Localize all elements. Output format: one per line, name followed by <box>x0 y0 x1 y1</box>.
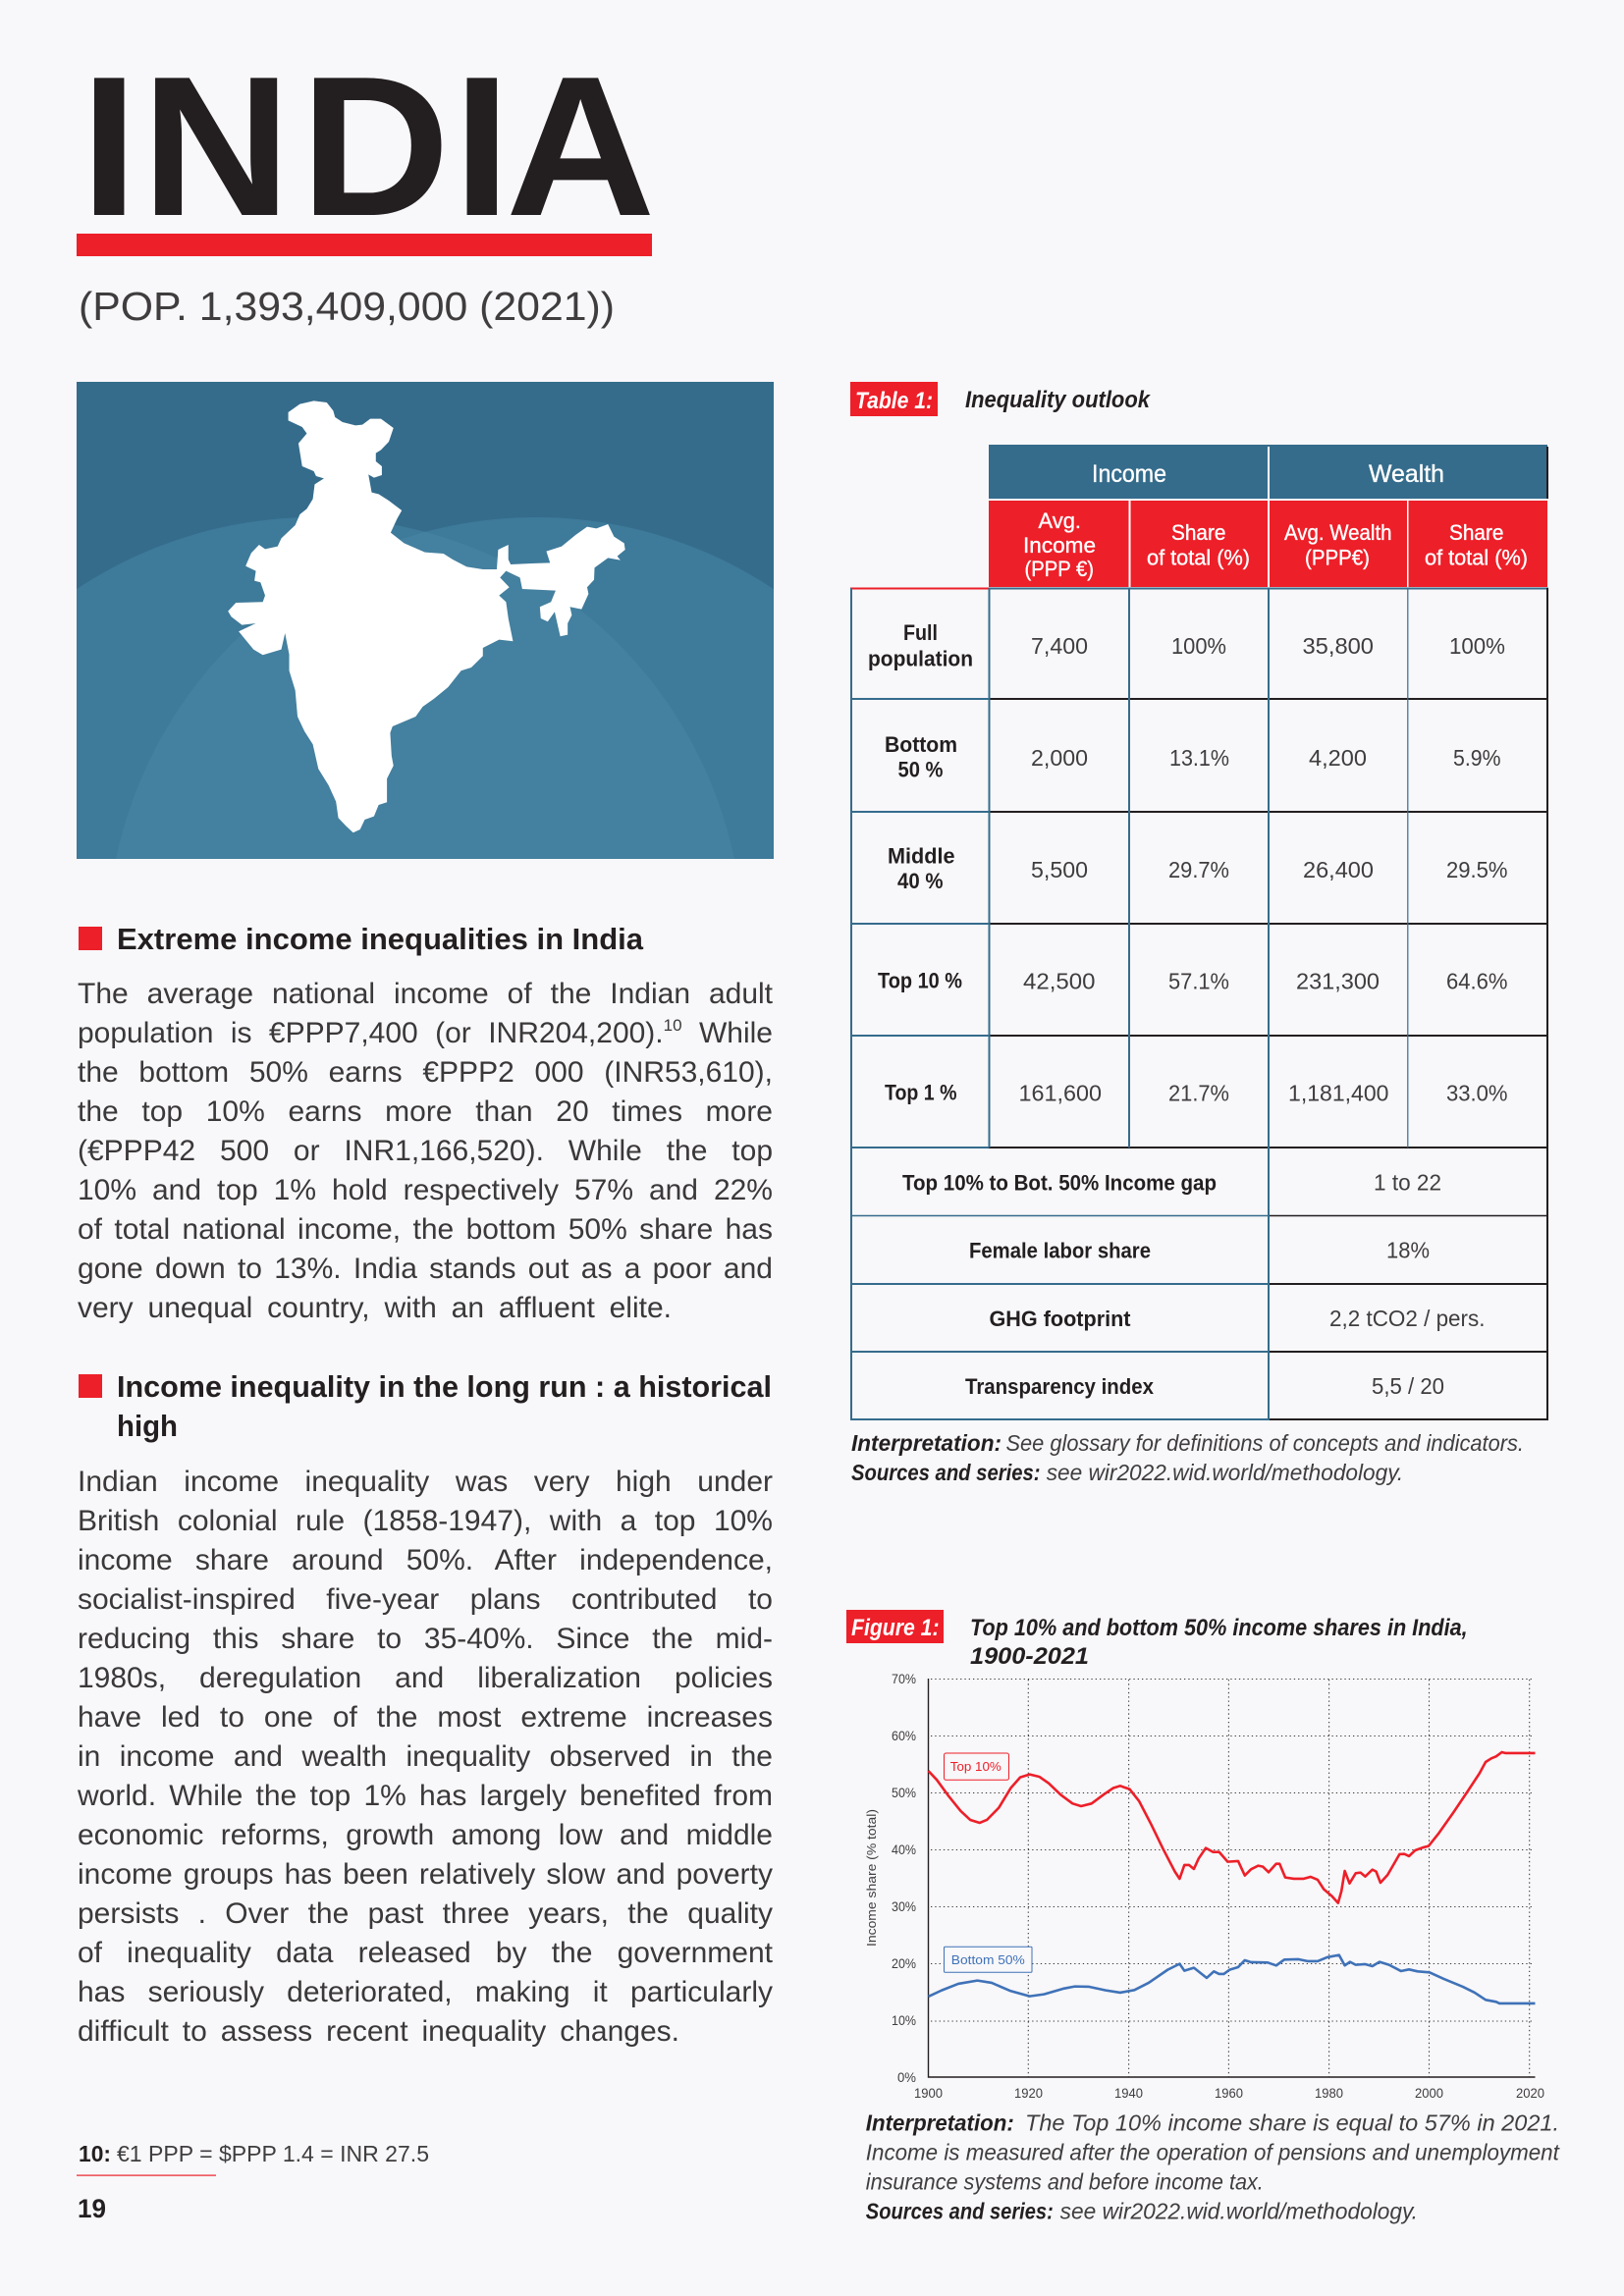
row: top 1%: 33.0% <box>1446 1080 1508 1105</box>
row: top 1%: Top 1 % <box>885 1080 956 1105</box>
x axis labels: 1960 <box>1215 2085 1243 2101</box>
row: full population: Full <box>903 620 938 645</box>
legend: bottom 50% <box>945 1947 1032 1972</box>
text block: inequality in the long run: difficult to assess recent inequality changes. <box>78 2015 679 2048</box>
line chart: income shares <box>865 1671 1544 2101</box>
text block: inequality in the long run: income groups has been relatively slow and poverty <box>78 1858 773 1891</box>
footnote: €1 PPP = $PPP 1.4 = INR 27.5 <box>117 2141 429 2166</box>
text block: extreme income inequalities: (€PPP42 500 or INR1,166,520). While the top <box>78 1135 773 1167</box>
table caption: Table 1: <box>855 388 933 414</box>
heading: inequality in the long run <box>79 1369 772 1443</box>
series: top 10% <box>928 1752 1535 1903</box>
table subheader: red columns: Avg. Wealth <box>1284 520 1392 545</box>
row: bottom 50%: Bottom <box>885 732 957 757</box>
row: middle 40%: Middle <box>888 844 954 868</box>
series: bottom 50% <box>928 1955 1535 2003</box>
x axis labels: 2000 <box>1415 2085 1443 2101</box>
text block: extreme income inequalities: The average national income of the Indian adult <box>78 978 773 1010</box>
chart grid <box>931 1679 1532 2077</box>
row: full population: population <box>868 646 973 671</box>
x axis labels: 1980 <box>1315 2085 1343 2101</box>
row: full population: 100% <box>1171 633 1226 659</box>
table header: income and wealth: Income <box>1092 460 1166 488</box>
panel: map of India <box>77 382 774 859</box>
text block: inequality in the long run: persists . Over the past three years, the quality <box>78 1897 773 1930</box>
text block: extreme income inequalities: 10% and top 1% hold respectively 57% and 22% <box>78 1174 773 1206</box>
figure note: interpretation and sources: insurance systems and before income tax. <box>866 2169 1264 2195</box>
figure note: interpretation and sources: Income is measured after the operation of pensions and unemployment <box>866 2140 1560 2165</box>
row: bottom 50%: 2,000 <box>1031 745 1088 771</box>
figure caption <box>846 1610 1468 1670</box>
x axis labels: 1940 <box>1114 2085 1143 2101</box>
y axis labels: 20% <box>892 1955 916 1971</box>
figure note: interpretation and sources <box>866 2110 1560 2224</box>
table caption <box>850 382 1152 416</box>
table subheader: red columns: of total (%) <box>1425 546 1528 569</box>
row: top 10%: 57.1% <box>1168 968 1229 993</box>
figure note: interpretation and sources: Sources and series: <box>866 2199 1054 2224</box>
row: top 1% <box>885 1080 1508 1105</box>
row: transparency index: Transparency index <box>965 1374 1155 1399</box>
icon: India silhouette <box>228 400 625 832</box>
legend: top 10% <box>945 1753 1009 1780</box>
text block: inequality in the long run: world. While the top 1% has largely benefited from <box>78 1780 773 1812</box>
text block: inequality in the long run: socialist-inspired five-year plans contributed to <box>78 1583 773 1616</box>
y axis labels: 60% <box>892 1728 916 1743</box>
figure note: interpretation and sources: see wir2022.wid.world/methodology. <box>1060 2199 1418 2224</box>
row: middle 40%: 5,500 <box>1031 857 1088 882</box>
legend: bottom 50%: Bottom 50% <box>951 1952 1025 1967</box>
x axis labels <box>914 2085 1544 2101</box>
row: top 10%: 231,300 <box>1296 968 1380 993</box>
row: top 10%: Top 10 % <box>878 968 962 993</box>
x axis labels: 1900 <box>914 2085 943 2101</box>
row: top 1%: 1,181,400 <box>1288 1080 1388 1105</box>
table header: income and wealth: Wealth <box>1369 460 1444 488</box>
row: full population: 100% <box>1449 633 1505 659</box>
row: middle 40%: 26,400 <box>1303 857 1374 882</box>
table subheader: red columns: of total (%) <box>1147 546 1250 569</box>
table subheader: red columns: Share <box>1171 520 1225 545</box>
table note: interpretation and sources <box>851 1430 1524 1485</box>
subtitle: population: (POP. 1,393,409,000 (2021)) <box>79 284 615 329</box>
row: full population <box>868 620 1505 671</box>
figure note: interpretation and sources: The Top 10% income share is equal to 57% in 2021. <box>1025 2110 1559 2136</box>
text block: inequality in the long run: 1980s, deregulation and liberalization policies <box>78 1662 773 1694</box>
row: GHG footprint: GHG footprint <box>990 1307 1131 1331</box>
x axis labels: 1920 <box>1014 2085 1043 2101</box>
row: income gap <box>902 1170 1441 1196</box>
title: INDIA <box>81 35 655 257</box>
row: bottom 50%: 50 % <box>897 758 943 781</box>
row: income gap: Top 10% to Bot. 50% Income gap <box>902 1170 1217 1196</box>
table note: interpretation and sources: Interpretation: <box>851 1430 1001 1456</box>
x axis labels: 2020 <box>1516 2085 1544 2101</box>
heading: inequality in the long run: high <box>117 1409 178 1443</box>
text block: extreme income inequalities: the bottom 50% earns €PPP2 000 (INR53,610), <box>78 1056 773 1089</box>
legend: top 10%: Top 10% <box>950 1759 1001 1774</box>
y axis labels: 10% <box>892 2012 916 2028</box>
table subheader: red columns: Income <box>1023 533 1096 558</box>
text block: inequality in the long run: of inequality data released by the government <box>78 1937 773 1969</box>
table header: income and wealth <box>989 445 1548 499</box>
y axis title: Income share (% total) <box>865 1809 879 1947</box>
text block: extreme income inequalities: population is €PPP7,400 (or INR204,200).10 While <box>78 1016 773 1049</box>
text block: inequality in the long run: economic reforms, growth among low and middle <box>78 1819 773 1851</box>
text block: inequality in the long run: reducing this share to 35-40%. Since the mid- <box>78 1623 773 1655</box>
row: middle 40%: 29.5% <box>1446 857 1508 882</box>
figure caption: Top 10% and bottom 50% income shares in India, <box>970 1615 1468 1641</box>
table: inequality outlook <box>850 445 1548 1420</box>
row: middle 40%: 40 % <box>897 869 943 893</box>
text block: extreme income inequalities: very unequal country, with an affluent elite. <box>78 1292 672 1324</box>
row: female labor share: 18% <box>1386 1237 1430 1262</box>
y axis labels: 70% <box>892 1671 916 1686</box>
text block: inequality in the long run: British colonial rule (1858-1947), with a top 10% <box>78 1505 773 1537</box>
row: top 10%: 64.6% <box>1446 968 1508 993</box>
row: GHG footprint <box>990 1306 1485 1331</box>
row: bottom 50% <box>885 732 1500 781</box>
row: top 10% <box>878 968 1508 993</box>
row: full population: 7,400 <box>1031 633 1088 659</box>
text block: inequality in the long run: income share around 50%. After independence, <box>78 1544 773 1576</box>
text block: extreme income inequalities: gone down to 13%. India stands out as a poor and <box>78 1253 773 1285</box>
footnote <box>77 2141 429 2176</box>
table note: interpretation and sources: See glossary for definitions of concepts and indicators. <box>1005 1430 1524 1456</box>
row: top 1%: 161,600 <box>1019 1080 1102 1105</box>
figure caption: 1900-2021 <box>970 1643 1089 1670</box>
table subheader: red columns: (PPP€) <box>1305 546 1370 569</box>
table subheader: red columns: (PPP €) <box>1025 557 1094 581</box>
footnote: 10: <box>79 2141 111 2166</box>
row: GHG footprint: 2,2 tCO2 / pers. <box>1329 1306 1485 1331</box>
row: bottom 50%: 5.9% <box>1453 745 1500 771</box>
row: full population: 35,800 <box>1302 633 1374 659</box>
table caption: Inequality outlook <box>965 387 1152 413</box>
figure note: interpretation and sources: Interpretation: <box>866 2110 1014 2136</box>
table subheader: red columns: Share <box>1449 520 1504 545</box>
table grid lines <box>850 588 1548 1420</box>
y axis labels: 0% <box>897 2069 916 2085</box>
heading: inequality in the long run: Income inequality in the long run : a historical <box>117 1369 772 1404</box>
page number: 19 <box>78 2194 106 2223</box>
table note: interpretation and sources: see wir2022.wid.world/methodology. <box>1047 1460 1403 1485</box>
text block: extreme income inequalities <box>78 978 773 1324</box>
row: top 10%: 42,500 <box>1023 968 1096 993</box>
row: transparency index <box>965 1373 1444 1399</box>
figure caption: Figure 1: <box>851 1615 939 1641</box>
text block: inequality in the long run: in income and wealth inequality observed in the <box>78 1740 773 1773</box>
text block: inequality in the long run <box>78 1466 773 2048</box>
text block: inequality in the long run: have led to one of the most extreme increases <box>78 1701 773 1734</box>
chart axes <box>929 1679 1536 2077</box>
row: transparency index: 5,5 / 20 <box>1372 1373 1444 1399</box>
y axis labels: 40% <box>892 1842 916 1857</box>
y axis labels <box>892 1671 916 2085</box>
row: female labor share: Female labor share <box>969 1239 1151 1262</box>
row: top 1%: 21.7% <box>1168 1080 1229 1105</box>
heading: extreme income inequalities: Extreme income inequalities in India <box>117 922 644 956</box>
text block: inequality in the long run: has seriously deteriorated, making it particularly <box>78 1976 773 2008</box>
row: middle 40%: 29.7% <box>1168 857 1229 882</box>
row: income gap: 1 to 22 <box>1374 1170 1441 1196</box>
table note: interpretation and sources: Sources and series: <box>851 1460 1041 1485</box>
y axis labels: 30% <box>892 1898 916 1914</box>
text block: inequality in the long run: Indian income inequality was very high under <box>78 1466 773 1498</box>
row: bottom 50%: 4,200 <box>1309 745 1367 771</box>
row: middle 40% <box>888 844 1508 893</box>
row: female labor share <box>969 1237 1430 1262</box>
text block: extreme income inequalities: of total national income, the bottom 50% share has <box>78 1213 773 1246</box>
table subheader: red columns: Avg. <box>1039 508 1081 533</box>
text block: extreme income inequalities: the top 10% earns more than 20 times more <box>78 1095 773 1128</box>
table subheader: red columns <box>989 501 1547 587</box>
row: bottom 50%: 13.1% <box>1169 745 1229 771</box>
y axis labels: 50% <box>892 1785 916 1800</box>
